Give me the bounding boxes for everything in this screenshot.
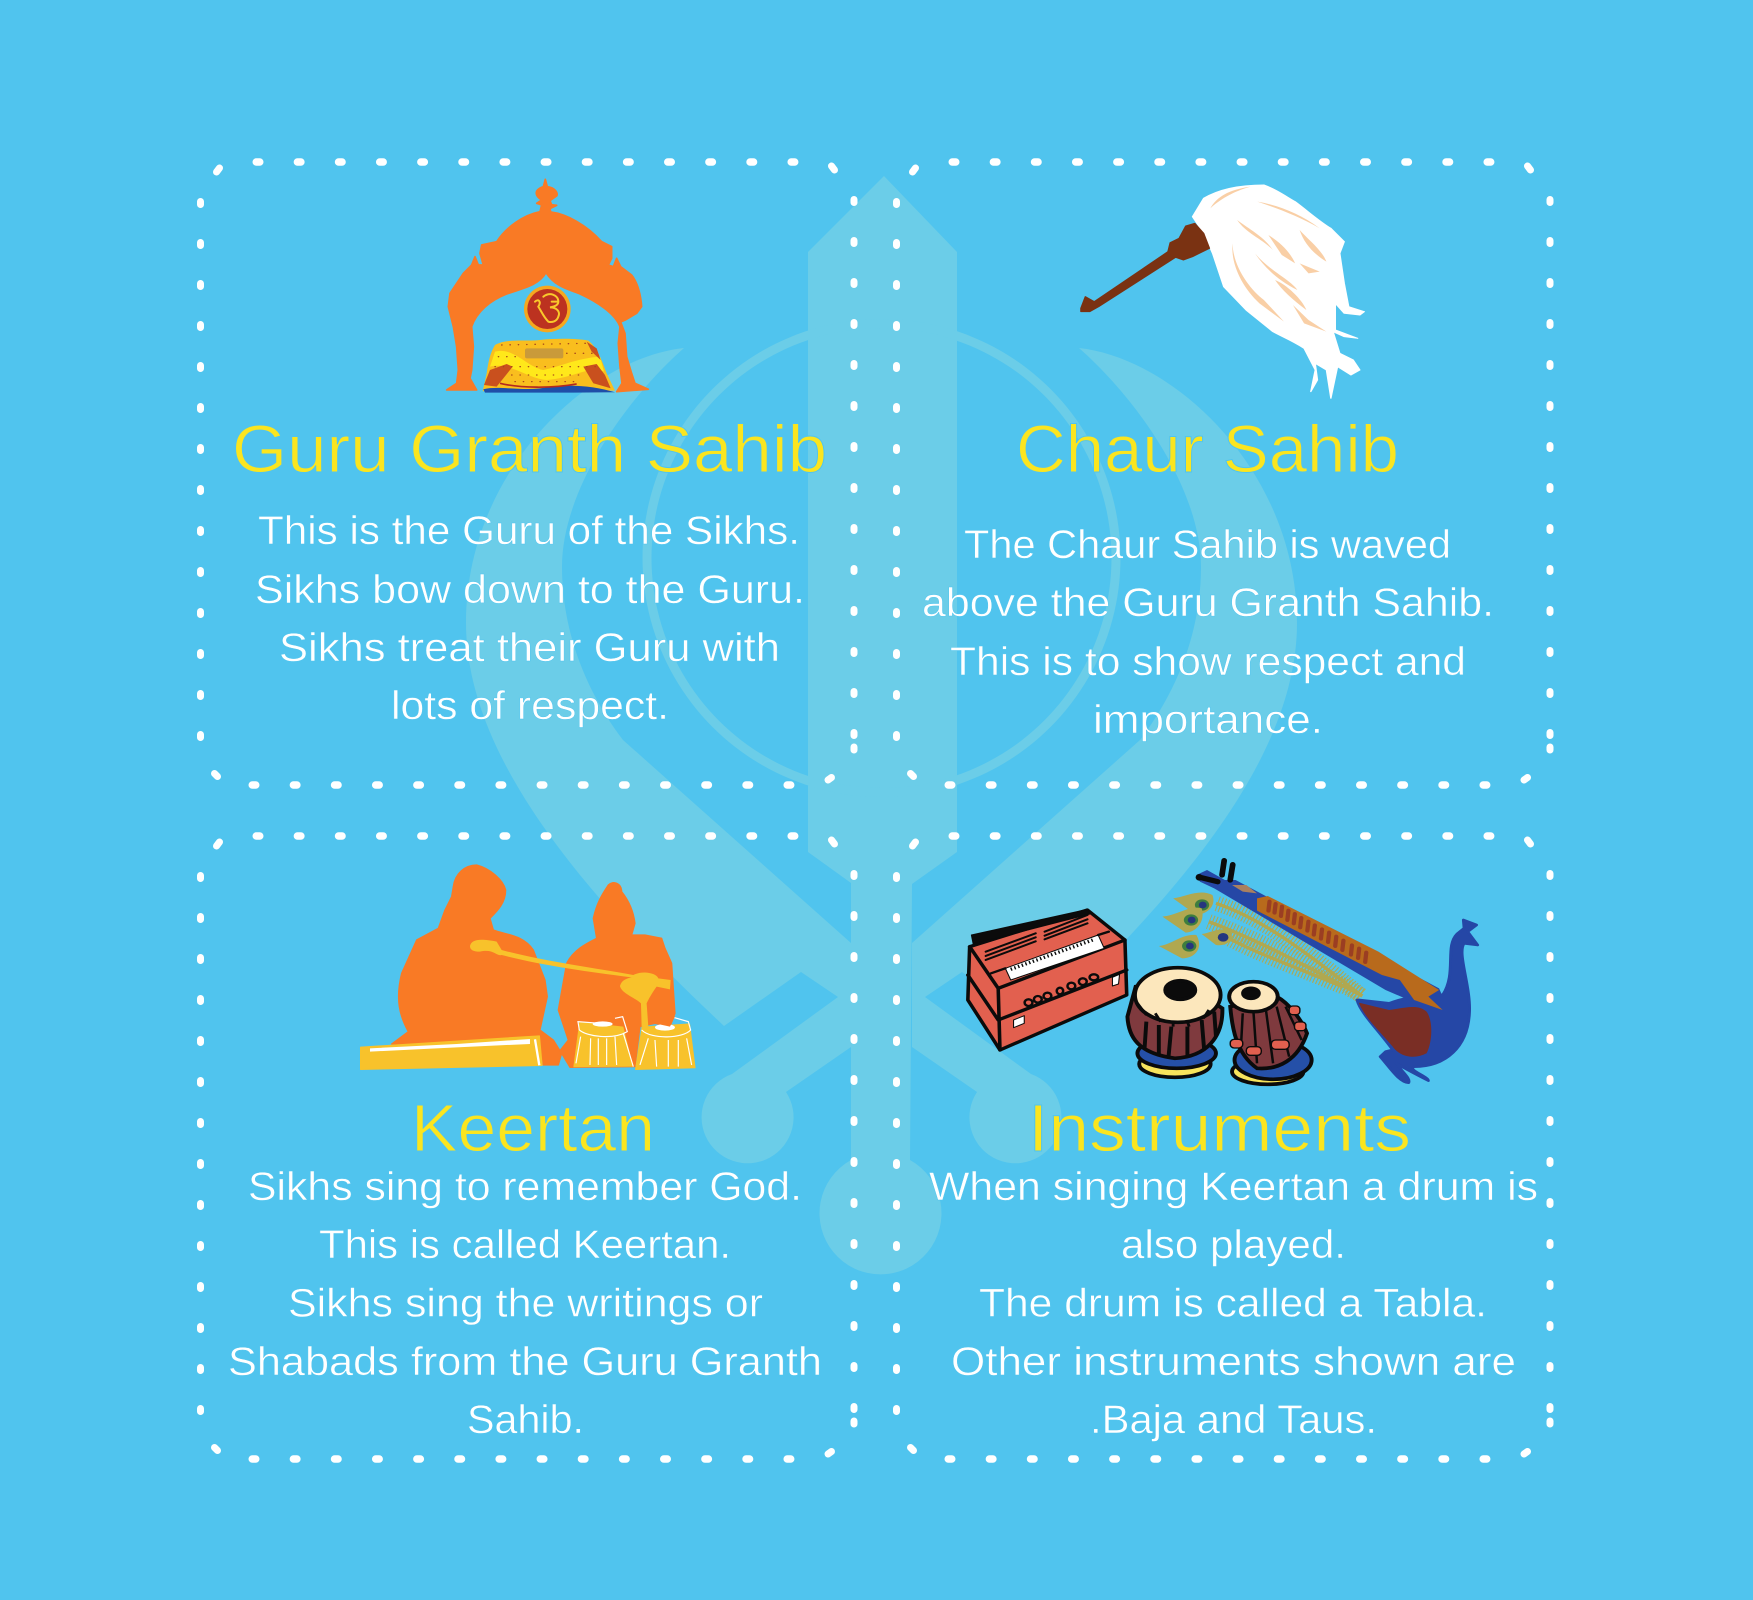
body text: Guru Granth Sahib: Sikhs treat their Guru with	[279, 626, 780, 670]
left musician silhouette	[392, 865, 562, 1065]
Ik Onkar medallion	[524, 286, 571, 332]
heading: Chaur Sahib: Chaur Sahib	[1016, 412, 1399, 487]
dotted frame top right	[896, 162, 1550, 785]
icon: instruments group	[968, 861, 1478, 1084]
panel: Instruments	[896, 836, 1550, 1459]
body text: Instruments: The drum is called a Tabla.	[979, 1282, 1487, 1326]
cloth-covered scripture	[483, 339, 615, 393]
body text: Keertan: Shabads from the Guru Granth	[228, 1340, 822, 1384]
icon: keertan musicians	[361, 865, 696, 1070]
body text: Guru Granth Sahib: This is the Guru of the Sikhs.	[258, 509, 800, 553]
yellow sitar	[470, 940, 671, 1027]
body text: Chaur Sahib: above the Guru Granth Sahib.	[922, 581, 1494, 625]
dotted frame top left	[200, 162, 854, 785]
heading: Guru Granth Sahib: Guru Granth Sahib	[232, 412, 827, 487]
heading: Keertan: Keertan	[411, 1091, 655, 1166]
yellow mat / harmonium	[361, 1036, 542, 1069]
body text: Guru Granth Sahib: Sikhs bow down to the Guru.	[255, 568, 805, 612]
small tabla drum	[1229, 982, 1312, 1084]
panel: Chaur Sahib	[896, 162, 1550, 785]
heading: Instruments: Instruments	[1028, 1091, 1411, 1166]
icon: chaur whisk	[1081, 185, 1364, 398]
watermark: khanda emblem	[466, 176, 1297, 1274]
body text: Instruments	[929, 1165, 1538, 1442]
right tabla	[635, 1013, 696, 1070]
left tabla	[573, 1017, 633, 1067]
large tabla drum	[1127, 968, 1222, 1077]
peach streaks	[1210, 187, 1326, 332]
panel: Guru Granth Sahib	[200, 162, 854, 785]
body text: Instruments: .Baja and Taus.	[1090, 1398, 1377, 1442]
body text: Keertan: This is called Keertan.	[319, 1223, 731, 1267]
body text: Instruments: When singing Keertan a drum is	[929, 1165, 1538, 1209]
body text: Instruments: also played.	[1121, 1223, 1346, 1267]
body text: Chaur Sahib	[922, 523, 1494, 742]
dotted frame bottom right	[896, 836, 1550, 1459]
dotted frame bottom left	[200, 836, 854, 1459]
body text: Keertan: Sahib.	[467, 1398, 584, 1442]
canopy silhouette	[447, 179, 648, 392]
body text: Keertan	[228, 1165, 822, 1442]
taus sitar and peacock body	[1196, 861, 1478, 1083]
body text: Guru Granth Sahib	[255, 509, 805, 728]
peacock feathers	[1159, 892, 1362, 996]
right musician silhouette	[558, 883, 675, 1067]
wooden handle	[1081, 223, 1209, 312]
harmonium	[968, 909, 1127, 1050]
body text: Keertan: Sikhs sing to remember God.	[248, 1165, 802, 1209]
panel: Keertan	[200, 836, 854, 1459]
body text: Keertan: Sikhs sing the writings or	[288, 1282, 763, 1326]
body text: Chaur Sahib: importance.	[1093, 698, 1323, 742]
body text: Chaur Sahib: The Chaur Sahib is waved	[964, 523, 1451, 567]
white plume	[1192, 185, 1364, 398]
icon: palki canopy with Guru Granth Sahib	[447, 179, 648, 393]
body text: Chaur Sahib: This is to show respect and	[950, 640, 1466, 684]
body text: Instruments: Other instruments shown are	[951, 1340, 1516, 1384]
body text: Guru Granth Sahib: lots of respect.	[391, 684, 669, 728]
